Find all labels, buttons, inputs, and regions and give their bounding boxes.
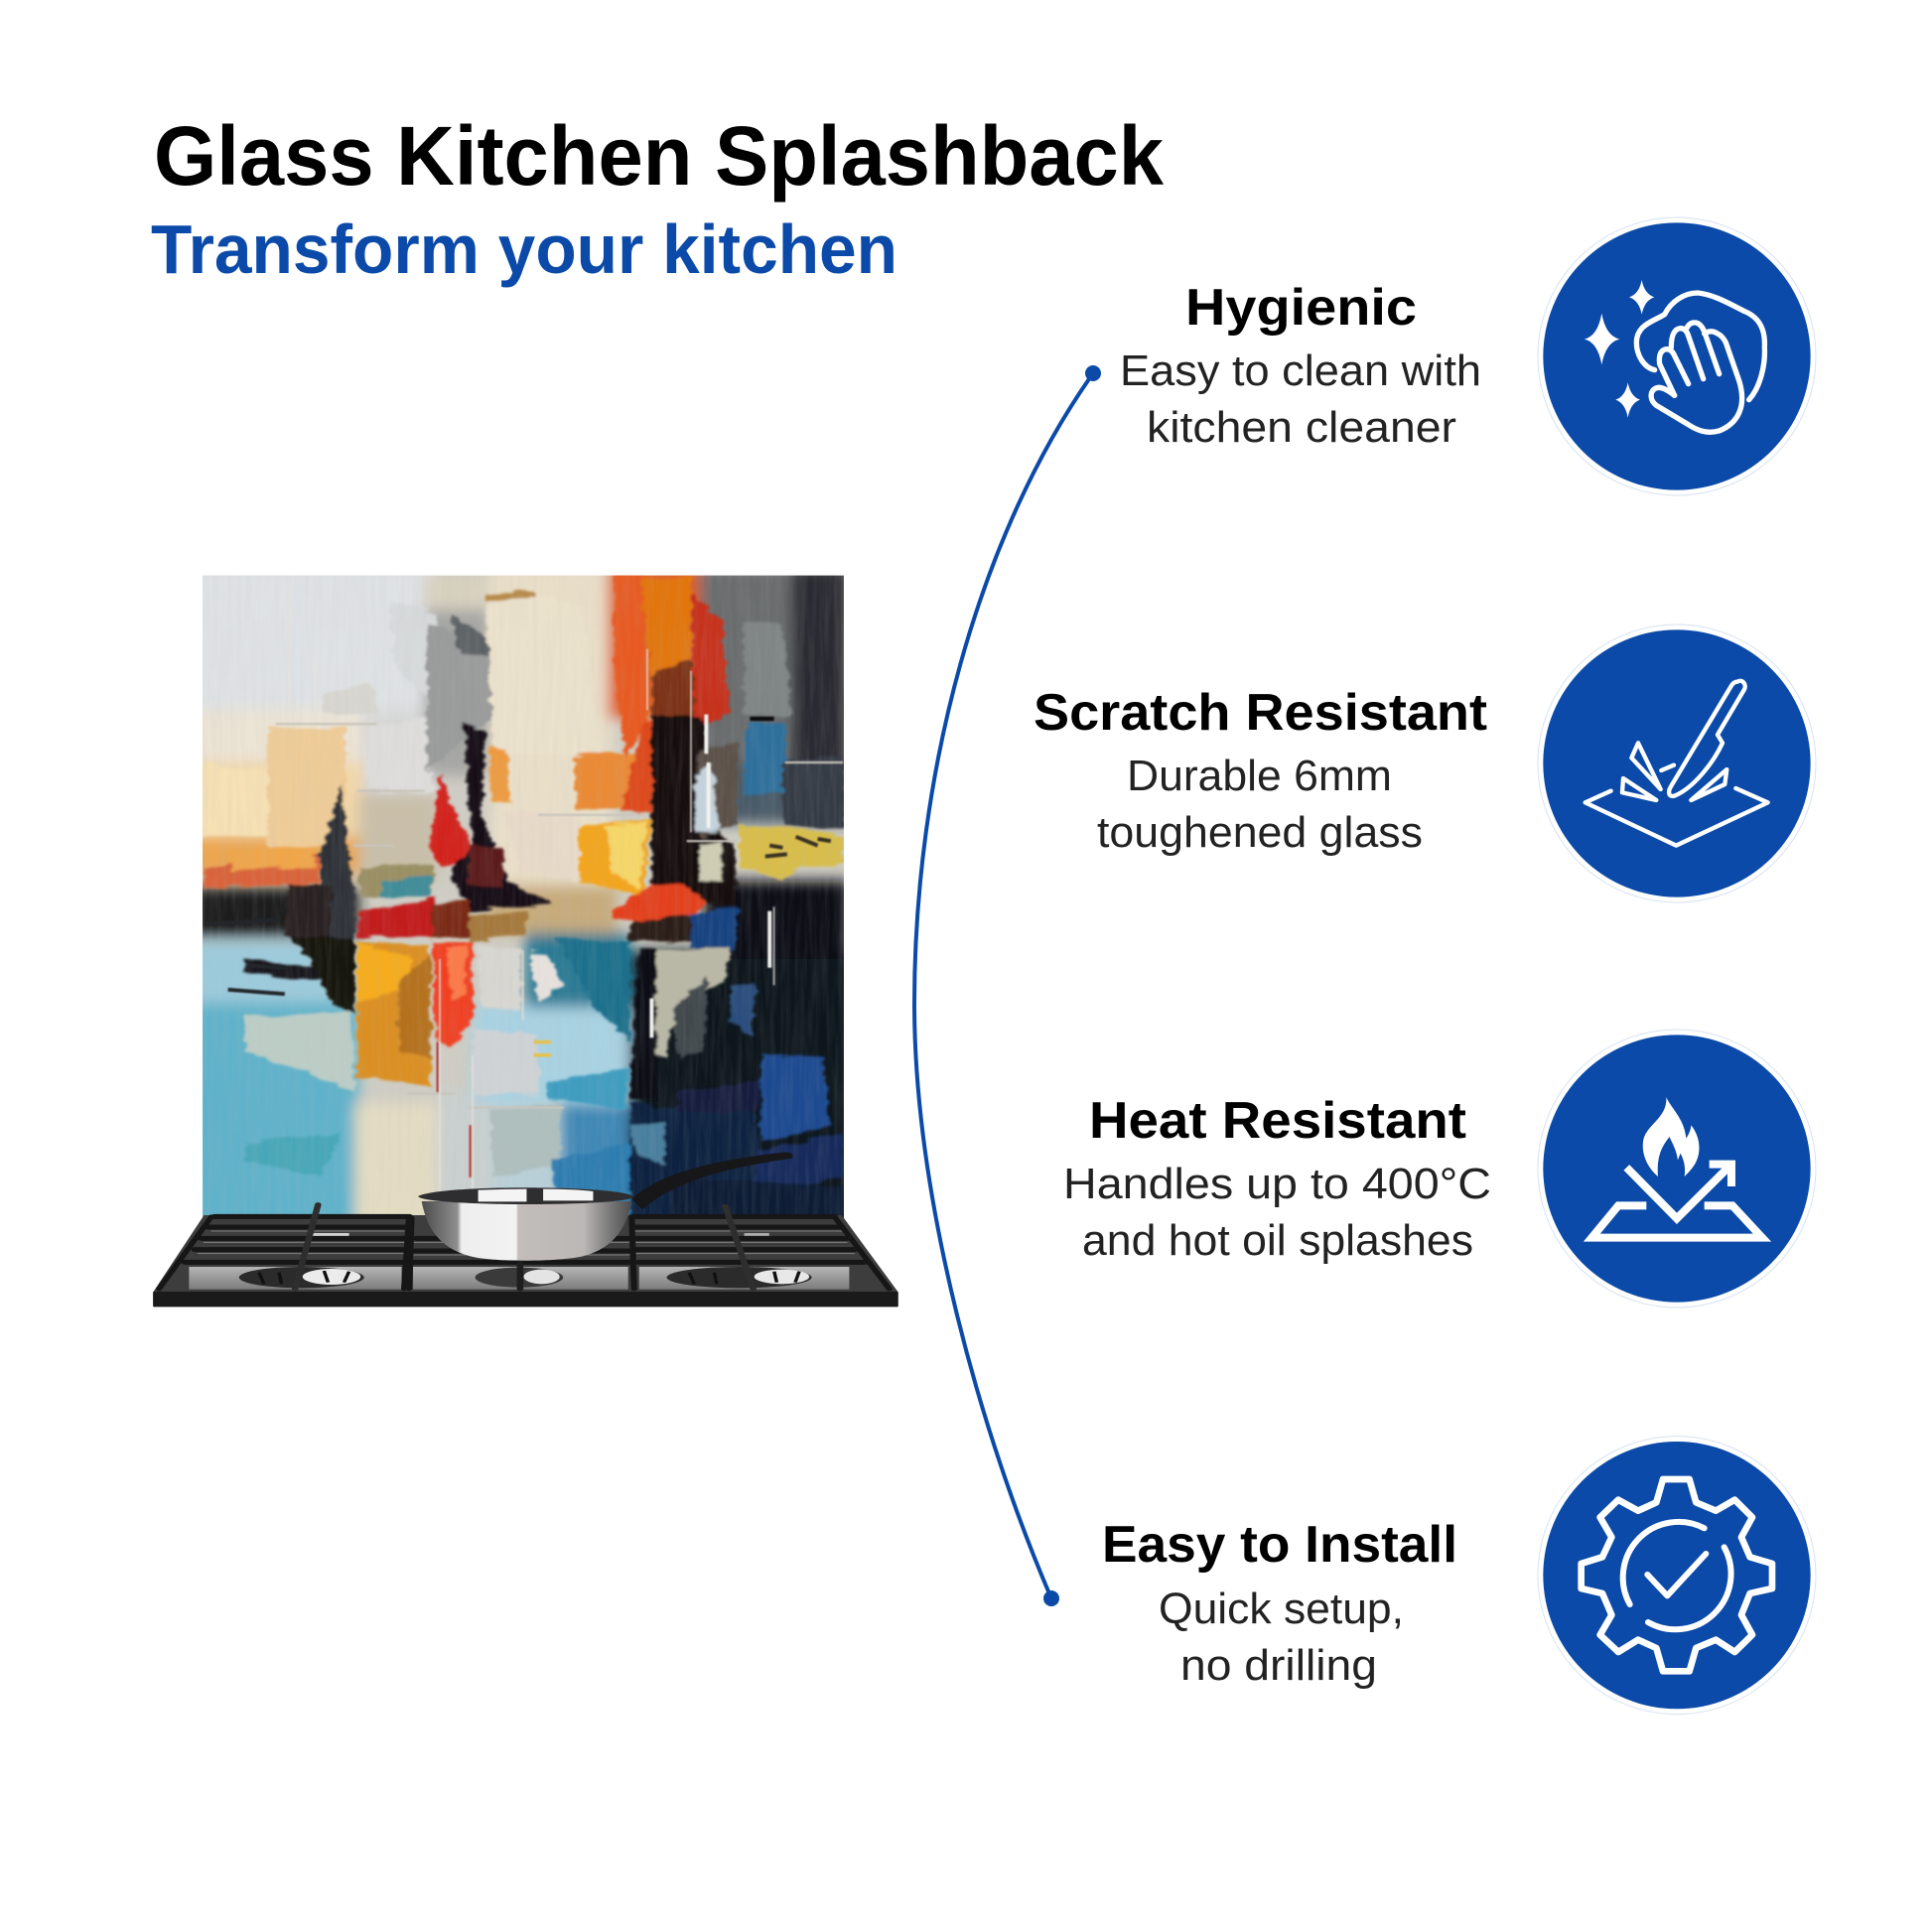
heading: scratch resistant: Scratch Resistant bbox=[1034, 684, 1487, 742]
icon: gear with check mark bbox=[1538, 1437, 1816, 1715]
text: heat description bbox=[1063, 1160, 1491, 1265]
heading: heat resistant: Heat Resistant bbox=[1089, 1092, 1466, 1150]
feature: heat resistant bbox=[1063, 1092, 1491, 1265]
abstract painting splashback bbox=[189, 566, 853, 1247]
title: Glass Kitchen Splashback bbox=[154, 109, 1164, 203]
icon: flame on glass with deflection arrow bbox=[1538, 1030, 1816, 1308]
feature: hygienic bbox=[1120, 279, 1481, 452]
curved connector with end dots bbox=[914, 365, 1101, 1606]
text: install description: Quick setup, bbox=[1159, 1585, 1404, 1633]
text: hygienic description bbox=[1120, 346, 1481, 452]
text: heat description: and hot oil splashes bbox=[1082, 1216, 1473, 1265]
feature: scratch resistant bbox=[1034, 684, 1487, 857]
gas hob with pan bbox=[153, 1153, 898, 1307]
text: install description bbox=[1159, 1585, 1404, 1690]
icon: knife scratching glass bbox=[1538, 624, 1816, 902]
pan interior highlights bbox=[479, 1189, 593, 1201]
text: heat description: Handles up to 400°C bbox=[1063, 1160, 1491, 1208]
cast iron grates bbox=[159, 1204, 890, 1289]
text: hygienic description: Easy to clean with bbox=[1120, 346, 1481, 395]
feature: easy to install bbox=[1102, 1516, 1457, 1690]
text: hygienic description: kitchen cleaner bbox=[1147, 403, 1456, 452]
icon: hand wiping with sparkles bbox=[1538, 217, 1816, 495]
text: install description: no drilling bbox=[1180, 1641, 1377, 1690]
hob steel surface bbox=[153, 1215, 898, 1293]
text: scratch description: Durable 6mm bbox=[1127, 752, 1392, 800]
text: scratch description: toughened glass bbox=[1097, 808, 1423, 857]
pan body bbox=[422, 1201, 631, 1261]
text: scratch description bbox=[1097, 752, 1423, 857]
subtitle: Transform your kitchen bbox=[151, 210, 897, 288]
infographic canvas bbox=[151, 123, 1817, 1716]
pan handle bbox=[631, 1153, 793, 1209]
heading: hygienic: Hygienic bbox=[1185, 279, 1417, 337]
heading: easy to install: Easy to Install bbox=[1102, 1516, 1457, 1574]
pan rim bbox=[418, 1187, 634, 1204]
burners bbox=[239, 1233, 812, 1288]
steel burner trays bbox=[189, 1267, 849, 1290]
hob front edge bbox=[153, 1292, 898, 1307]
